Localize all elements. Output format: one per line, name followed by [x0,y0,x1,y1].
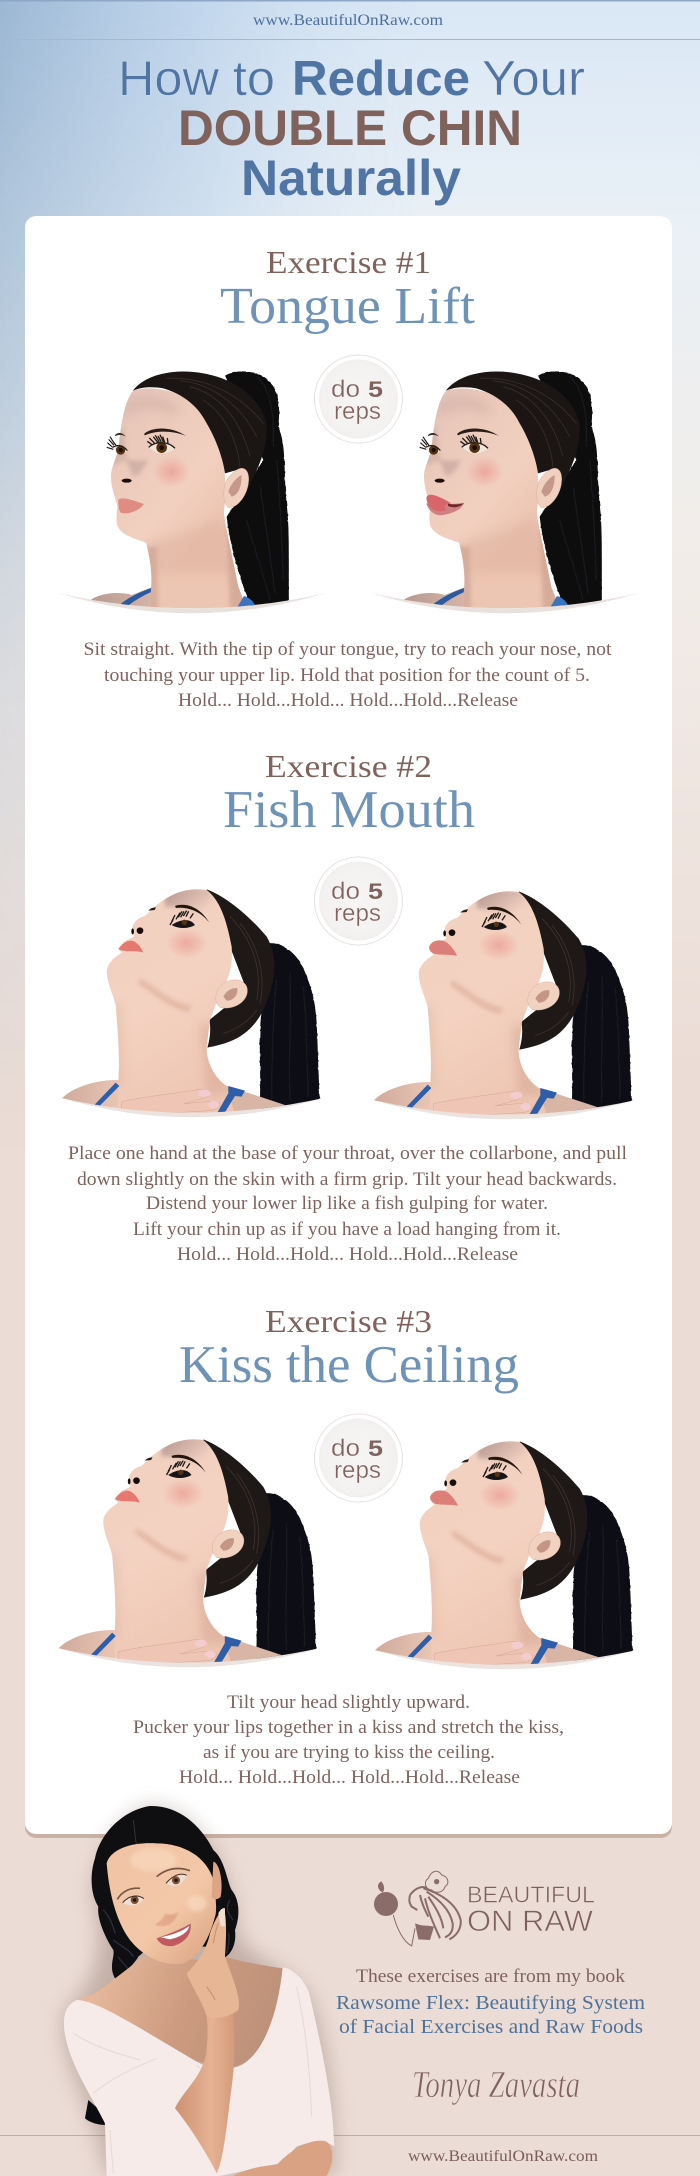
book credit: These exercises are from my book [356,1966,626,1987]
exercise 1 heading: Exercise #1 [266,244,431,280]
illustration: exercise 2 fish mouth pose [369,890,639,1122]
panel: exercises card [25,216,672,1838]
illustration: exercise 3 kiss pose [370,1440,640,1672]
badge: do 5 reps: do [331,1435,360,1462]
exercise 2 instructions: Distend your lower lip like a fish gulping for water. [146,1193,548,1214]
title: Naturally [241,150,461,206]
exercise 1 instructions: Hold... Hold...Hold... Hold...Hold...Release [178,690,518,711]
exercise 2 instructions: Hold... Hold...Hold... Hold...Hold...Release [177,1244,518,1265]
badge: do 5 reps [314,857,402,945]
exercise 3 heading: Exercise #3 [265,1303,432,1339]
top bar with website address: www.BeautifulOnRaw.com [253,12,444,29]
badge: do 5 reps: 5 [368,1436,383,1461]
illustration: exercise 3 neutral pose [53,1438,323,1670]
logo: Beautiful On Raw [374,1871,595,1946]
badge: do 5 reps: reps [334,1457,381,1484]
exercise 3 instructions: Pucker your lips together in a kiss and stretch the kiss, [133,1717,564,1738]
illustration: exercise 2 neutral pose [57,888,327,1120]
footer divider line [0,2135,700,2136]
badge: do 5 reps: reps [334,900,381,927]
title [118,52,585,206]
exercise 2 instructions: Place one hand at the base of your throat, over the collarbone, and pull [68,1143,627,1164]
title: How to [118,52,275,106]
illustration: exercise 1 tongue lift pose [371,371,639,617]
footer website address: www.BeautifulOnRaw.com [408,2148,599,2165]
logo: Beautiful On Raw: ON RAW [467,1905,594,1938]
badge: do 5 reps: do [331,878,360,905]
background [0,2,700,956]
exercise 2 heading [223,748,475,839]
logo: Beautiful On Raw: BEAUTIFUL [467,1882,595,1908]
exercise 3 heading [179,1303,519,1394]
exercise 2 instructions: Lift your chin up as if you have a load hanging from it. [133,1219,561,1240]
exercise 3 instructions: Tilt your head slightly upward. [227,1692,470,1713]
title: Reduce [292,52,470,106]
badge: do 5 reps: 5 [368,879,383,904]
badge: do 5 reps [314,1414,402,1502]
icon: apple and woman silhouette [374,1871,461,1946]
exercise 1 heading [220,244,476,335]
badge: do 5 reps: do [331,376,360,403]
book credit: of Facial Exercises and Raw Foods [339,2016,643,2038]
badge: do 5 reps: 5 [368,377,383,402]
book credit [336,1966,645,2038]
exercise 2 instructions [68,1143,627,1265]
title: DOUBLE CHIN [178,100,522,156]
signature: Tonya Zavasta [412,2064,580,2106]
badge: do 5 reps [314,355,402,443]
title: Your [482,52,585,106]
exercise 1 instructions [84,639,612,711]
exercise 3 instructions [133,1692,564,1788]
exercise 1 instructions: Sit straight. With the tip of your tongue, try to reach your nose, not [84,639,612,660]
exercise 2 heading: Fish Mouth [223,781,475,839]
exercise 2 heading: Exercise #2 [265,748,432,784]
illustration: exercise 1 neutral pose [58,371,326,617]
book credit: Rawsome Flex: Beautifying System [336,1992,645,2014]
exercise 3 instructions: Hold... Hold...Hold... Hold...Hold...Release [179,1767,520,1788]
exercise 1 heading: Tongue Lift [220,278,476,335]
exercise 3 instructions: as if you are trying to kiss the ceiling. [203,1742,495,1763]
exercise 1 instructions: touching your upper lip. Hold that position for the count of 5. [104,665,590,686]
exercise 2 instructions: down slightly on the skin with a firm grip. Tilt your head backwards. [77,1169,617,1190]
exercise 3 heading: Kiss the Ceiling [179,1336,519,1394]
portrait: author [63,1806,335,2176]
badge: do 5 reps: reps [334,398,381,425]
